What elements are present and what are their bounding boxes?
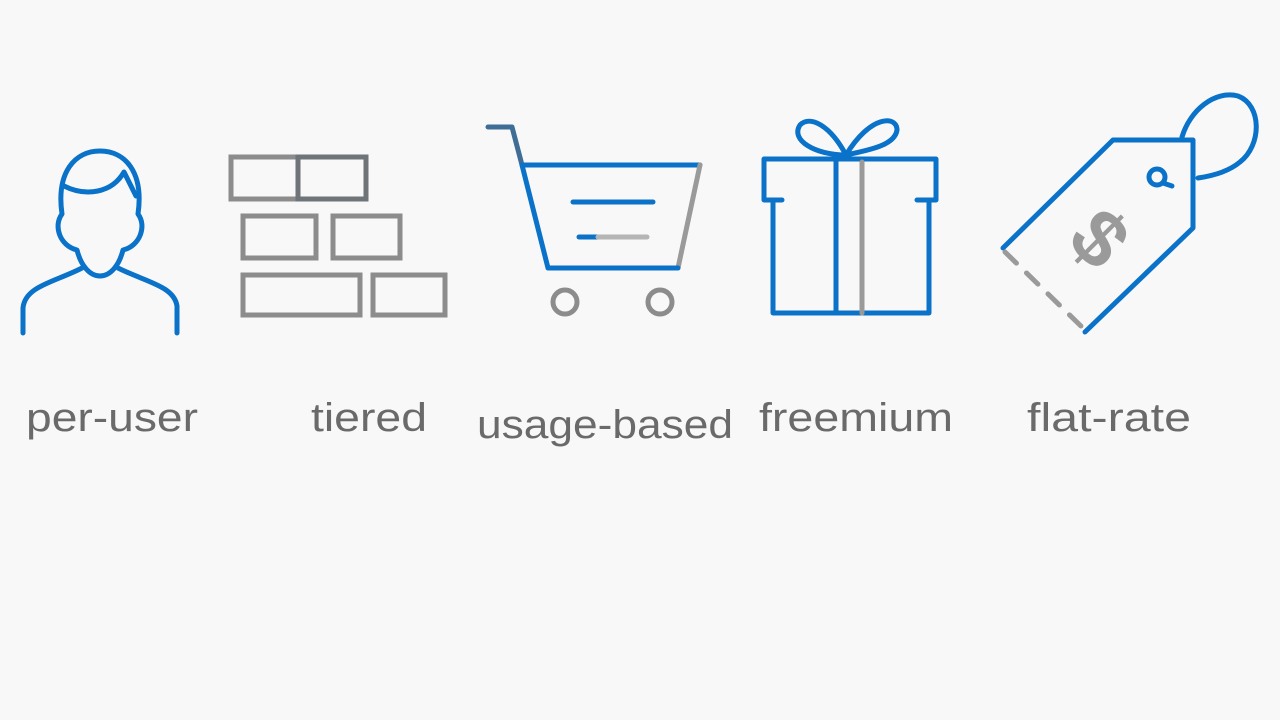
label: tiered: tiered [311, 396, 427, 440]
label: flat-rate: flat-rate [1027, 396, 1191, 440]
icon: shopping cart [488, 127, 700, 314]
label: usage-based: usage-based [477, 403, 733, 447]
icon: price tag [1003, 95, 1256, 332]
icon: person [23, 151, 177, 333]
icon: gift [764, 121, 936, 313]
icon: price tag: $ [1052, 191, 1147, 286]
label: freemium: freemium [759, 396, 953, 440]
icon: bricks [231, 157, 445, 315]
label: per-user: per-user [26, 396, 198, 440]
